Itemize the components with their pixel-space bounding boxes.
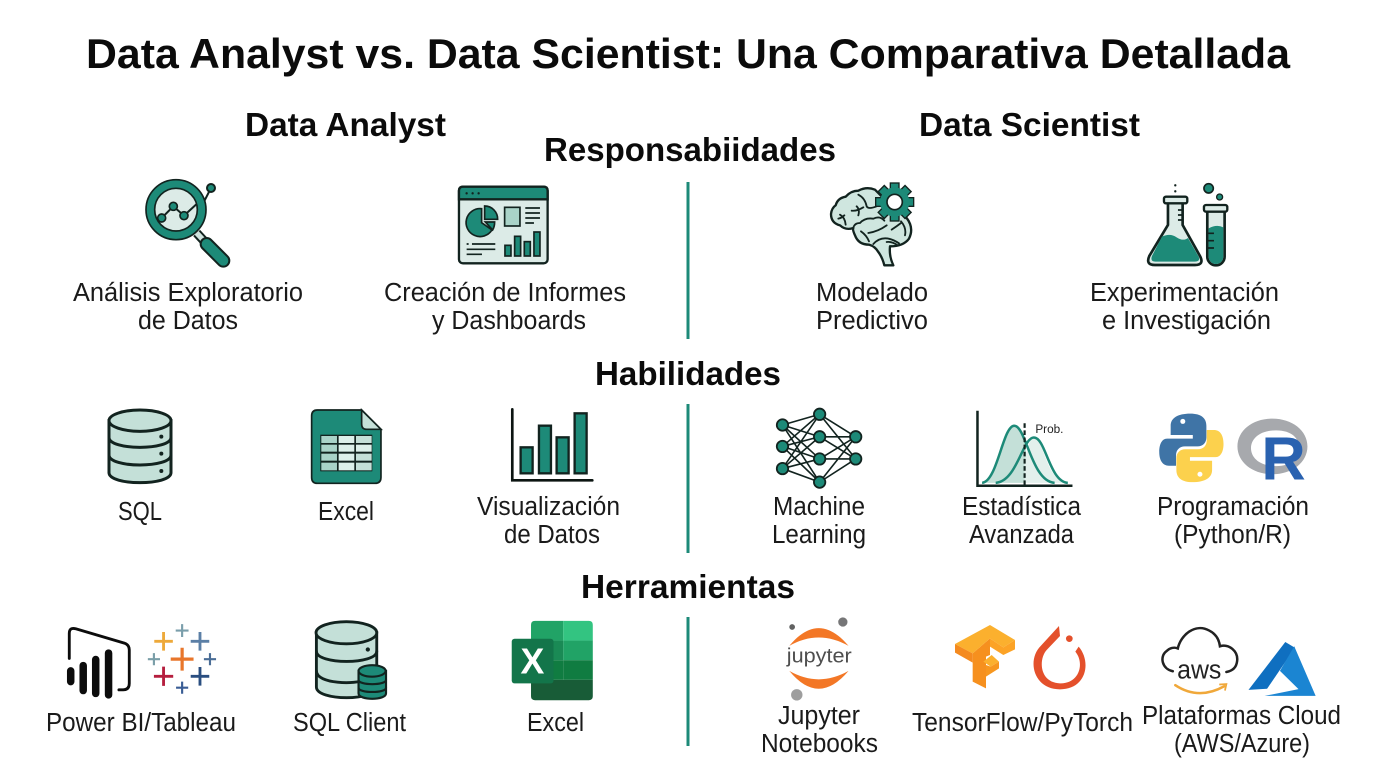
icon: neural network <box>777 409 861 488</box>
label: Machine <box>773 493 865 521</box>
label <box>477 493 620 549</box>
item: Análisis Exploratorio <box>73 184 303 335</box>
label <box>1090 279 1279 335</box>
heading: Data Scientist: Data Scientist <box>919 106 1140 143</box>
item: Estadística Avanzada <box>962 411 1082 549</box>
label: Experimentación <box>1090 279 1279 307</box>
label: Predictivo <box>816 307 928 335</box>
icon: AWS logo: aws <box>1177 656 1221 684</box>
icon: probability distribution curves: Prob. <box>1035 423 1063 436</box>
item: Visualización de Datos <box>477 409 620 549</box>
divider: habilidades <box>686 404 690 553</box>
label: (AWS/Azure) <box>1174 730 1310 758</box>
icon: Azure logo <box>1249 642 1316 696</box>
icon: Python logo <box>1159 414 1224 482</box>
title: Data Analyst vs. Data Scientist: Una Comparativa Detallada <box>86 30 1291 77</box>
item: Jupyter Notebooks <box>761 617 878 758</box>
icon: dashboard <box>459 187 548 263</box>
item: TensorFlow/PyTorch <box>912 625 1133 737</box>
label: Jupyter <box>778 702 860 730</box>
icon: database client <box>316 622 386 699</box>
item: Modelado Predictivo <box>816 183 928 335</box>
label: Visualización <box>477 493 620 521</box>
label: Análisis Exploratorio <box>73 279 303 307</box>
label: SQL Client <box>293 709 406 737</box>
icon: bar chart <box>512 409 592 480</box>
item: Experimentación <box>1090 184 1279 335</box>
icon: flask and test tube <box>1148 184 1227 265</box>
label: Modelado <box>816 279 928 307</box>
heading: Data Analyst: Data Analyst <box>245 106 446 143</box>
label: de Datos <box>504 521 600 549</box>
label: Avanzada <box>969 521 1075 549</box>
divider: herramientas <box>686 617 690 746</box>
label <box>772 493 866 549</box>
label <box>1157 493 1309 549</box>
heading: Herramientas: Herramientas <box>581 568 795 605</box>
label: Creación de Informes <box>384 279 626 307</box>
icon: R logo <box>1237 419 1307 493</box>
item: Power BI/Tableau <box>46 624 236 737</box>
icon: Tableau logo <box>148 624 216 694</box>
icon: spreadsheet file <box>312 410 381 483</box>
label <box>384 279 626 335</box>
icon: brain with gear <box>831 183 914 265</box>
item: Plataformas Cloud <box>1142 628 1341 758</box>
item: Programación <box>1157 414 1309 549</box>
label <box>962 493 1082 549</box>
divider: responsabilidades <box>686 182 690 339</box>
label <box>73 279 303 335</box>
icon: PyTorch logo <box>1034 626 1086 689</box>
label <box>761 702 878 758</box>
item: Machine Learning <box>772 409 866 549</box>
label: Excel <box>527 709 584 737</box>
label: Power BI/Tableau <box>46 709 236 737</box>
heading: Habilidades: Habilidades <box>595 355 781 392</box>
label: Excel <box>318 498 374 526</box>
heading: Responsabilidades: Responsabiidades <box>544 131 836 168</box>
icon: Jupyter logo: jupyter <box>786 646 852 668</box>
label: SQL <box>118 498 162 526</box>
label: TensorFlow/PyTorch <box>912 709 1133 737</box>
icon: TensorFlow logo <box>955 625 1015 688</box>
label: Programación <box>1157 493 1309 521</box>
icon: AWS logo <box>1162 628 1237 693</box>
label: Notebooks <box>761 730 878 758</box>
icon: Jupyter logo <box>786 617 852 701</box>
label <box>1142 702 1341 758</box>
item: Excel <box>312 410 381 526</box>
item: Excel tool <box>512 621 593 737</box>
label: de Datos <box>138 307 238 335</box>
icon: magnifier with line chart <box>150 184 223 261</box>
icon: Excel logo: X <box>521 641 545 681</box>
label: Estadística <box>962 493 1082 521</box>
label: Learning <box>772 521 866 549</box>
label: y Dashboards <box>432 307 586 335</box>
label <box>816 279 928 335</box>
item: SQL <box>109 410 171 526</box>
label: (Python/R) <box>1174 521 1291 549</box>
item: SQL Client <box>293 622 406 737</box>
label: e Investigación <box>1102 307 1271 335</box>
icon: R logo: R <box>1261 424 1306 493</box>
icon: database <box>109 410 171 483</box>
icon: Power BI logo <box>69 628 129 695</box>
item: Creación de Informes <box>384 187 626 335</box>
label: Plataformas Cloud <box>1142 702 1341 730</box>
